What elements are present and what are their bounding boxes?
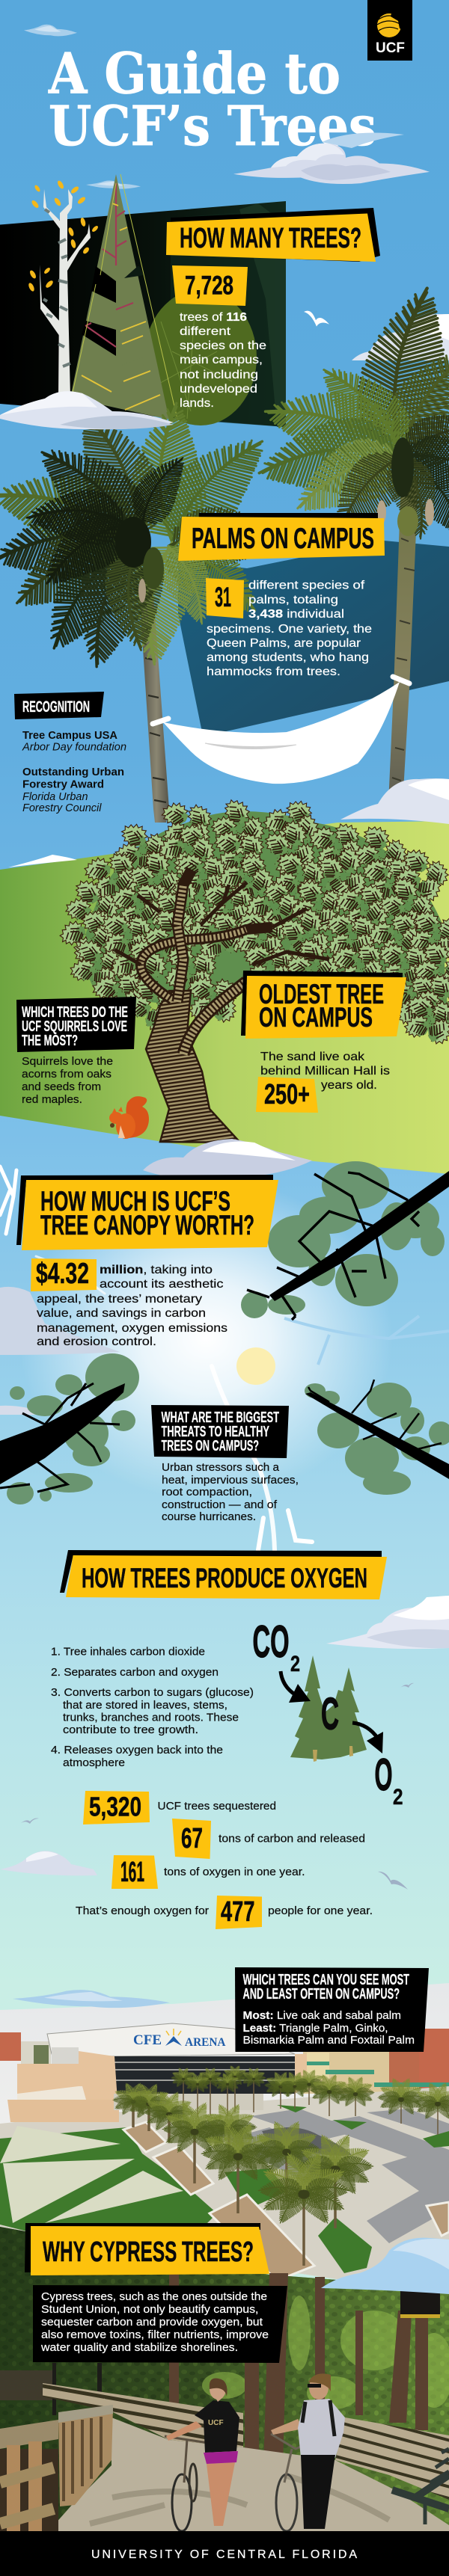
text: recognition list: Forestry Award (22, 779, 104, 791)
cloud: left behind text (0, 1287, 120, 1415)
text: canopy worth: million , taking into (100, 1264, 213, 1276)
text: oldest tree: The sand live oak (260, 1051, 365, 1063)
heading: canopy worth (16, 1175, 278, 1250)
hillside (0, 821, 449, 1174)
near railing (0, 2420, 58, 2531)
text: canopy worth: appeal, the trees’ monetary (37, 1293, 202, 1306)
box: squirrels question (16, 997, 136, 1052)
text: trees count: not including (180, 369, 258, 381)
text: recognition list (22, 730, 126, 814)
footer (0, 2531, 449, 2576)
icon: bird (304, 311, 329, 327)
box: most and least trees (235, 1967, 429, 2052)
box: cypress text (33, 2285, 287, 2363)
stat: 161: 161 (120, 1857, 144, 1888)
text: trees count: different (180, 325, 231, 338)
trunks (52, 2273, 428, 2468)
text: palm species: 3,438 individual (248, 608, 344, 621)
photo: students on boardwalk (0, 2227, 449, 2531)
text: oxygen steps: 1. Tree inhales carbon dioxide (51, 1645, 205, 1659)
footer: UNIVERSITY OF CENTRAL FLORIDA (91, 2548, 357, 2561)
illustration: branch bottom left (0, 1353, 139, 1504)
stat: 477: people for one year. (268, 1905, 373, 1917)
logo: CFE Arena (133, 2029, 226, 2049)
icon: squirrel (109, 1096, 149, 1139)
text: threats answer: heat, impervious surfaces, (162, 1474, 299, 1487)
illustration: left palm (0, 399, 287, 823)
building: dorms right (303, 2029, 449, 2094)
stat: 67 (172, 1819, 365, 1859)
text: squirrels answer: Squirrels love the (22, 1055, 113, 1068)
illustration: branch bottom right (305, 1380, 449, 1495)
text: threats answer: root compaction, (162, 1486, 252, 1498)
stat: 31 (206, 578, 244, 618)
text: oldest tree: behind Millican Hall is (260, 1065, 390, 1078)
text: palm species: specimens. One variety, the (207, 623, 372, 636)
illustration: right palm (257, 286, 449, 804)
text: trees count (180, 311, 266, 410)
cloud: bottom right (321, 2238, 449, 2294)
heading: canopy worth: HOW MUCH IS UCF’S (40, 1186, 230, 1217)
text: oxygen steps: atmosphere (63, 1756, 125, 1769)
cloud: large under title (233, 133, 430, 184)
cloud: behind cone (86, 181, 141, 189)
text: threats answer (162, 1461, 299, 1523)
diagram: carbon cycle: 2 (290, 1652, 300, 1676)
logo: CFE Arena: CFE (133, 2032, 162, 2048)
right railing (335, 2417, 449, 2500)
text: trees count: trees of 116 (180, 311, 247, 324)
text: canopy worth (37, 1264, 227, 1348)
text: canopy worth: value, and savings in carbon (37, 1307, 206, 1320)
box: threats question: THREATS TO HEALTHY (162, 1423, 269, 1440)
text: palm species: palms, totaling (248, 594, 338, 606)
heading: how trees produce oxygen (60, 1550, 387, 1599)
cloud: top small (24, 25, 77, 36)
panel: palms background (178, 541, 449, 732)
stat: 5,320: UCF trees sequestered (157, 1800, 276, 1813)
arena roof (47, 2023, 295, 2056)
text: squirrels answer: red maples. (22, 1093, 82, 1106)
stat: 250+: 250+ (264, 1079, 310, 1110)
left railing (58, 2405, 113, 2506)
text: squirrels answer (22, 1055, 113, 1106)
text: canopy worth: and erosion control. (37, 1335, 156, 1348)
text: palm species: Queen Palms, are popular (207, 637, 361, 650)
diagram: carbon cycle: 2 (393, 1785, 403, 1810)
sun glow (19, 1178, 393, 1499)
background foliage (202, 2296, 449, 2409)
cloud: right behind palm (352, 314, 449, 360)
text: trees count: main campus, (180, 354, 263, 366)
heading: why cypress trees: WHY CYPRESS TREES? (43, 2237, 254, 2268)
stat: 477: 477 (221, 1896, 254, 1928)
text: oxygen steps: 2. Separates carbon and oxygen (51, 1666, 219, 1679)
box: most and least trees: Most: Live oak and sabal palm (242, 2009, 401, 2022)
stat: 477: That’s enough oxygen for (76, 1905, 209, 1917)
text: recognition list: Outstanding Urban (22, 766, 124, 778)
text: oxygen steps: 4. Releases oxygen back into the (51, 1744, 223, 1756)
arena facade (79, 2051, 119, 2122)
text: trees count: species on the (180, 339, 266, 352)
arrow: in (281, 1671, 311, 1703)
boardwalk deck (49, 2417, 449, 2531)
box: cypress text: water quality and stabilize shorelines. (40, 2341, 238, 2354)
text: palm species (207, 579, 372, 678)
illustration: cone tree (70, 174, 179, 425)
logo: UCF: UCF (376, 40, 405, 56)
student: man (271, 2373, 345, 2531)
cloud: right of diagram (326, 1596, 449, 1649)
box: threats question (151, 1405, 289, 1458)
box: most and least trees: Bismarkia Palm and Foxtail Palm (242, 2034, 415, 2047)
label: recognition: RECOGNITION (22, 698, 90, 716)
logo: CFE Arena: ARENA (185, 2036, 226, 2049)
text: oxygen steps: trunks, branches and roots. These (63, 1711, 239, 1724)
box: cypress text: Student Union, not only beautify campus, (41, 2303, 259, 2316)
stat: 477 (76, 1896, 373, 1929)
cloud: island bottom-left of panel (0, 391, 174, 429)
box: most and least trees: Least: Triangle Palm, Ginko, (242, 2022, 388, 2035)
planters (123, 2122, 449, 2281)
text: threats answer: construction — and of (162, 1498, 278, 1511)
text: palm species: different species of (248, 579, 365, 592)
text: palm species: among students, who hang (207, 651, 369, 664)
photo: CFE Arena plaza (0, 1983, 449, 2288)
diagram: carbon cycle: C (321, 1688, 339, 1739)
stat: 250+ (256, 1077, 318, 1113)
arena wall (52, 2047, 79, 2071)
text: palm species: hammocks from trees. (207, 665, 340, 678)
stat: 67: 67 (181, 1823, 203, 1854)
text: oxygen steps: 3. Converts carbon to sugars (glucose) (51, 1686, 254, 1699)
stat: 31: 31 (215, 582, 231, 612)
title: A Guide to (48, 40, 340, 106)
stat: 7,728: 7,728 (185, 271, 233, 301)
heading: why cypress trees (25, 2223, 269, 2275)
box: cypress text: also remove toxins, filter nutrients, improve (41, 2328, 269, 2341)
arrow: out (352, 1723, 383, 1753)
sign (400, 2288, 440, 2318)
ground: paving stripes (224, 2109, 449, 2243)
heading: canopy worth: TREE CANOPY WORTH? (40, 1210, 254, 1241)
stat: 7,728 (172, 265, 248, 306)
title: UCF’s Trees (49, 94, 376, 159)
diagram: carbon cycle (253, 1617, 403, 1810)
cloud: under trunk (143, 1139, 312, 1182)
illustration: hammock (153, 677, 409, 784)
text: squirrels answer: and seeds from (22, 1080, 101, 1093)
artwork: pegasus paving (262, 2127, 352, 2156)
illustration: oak tree (52, 789, 449, 1143)
text: oxygen steps: contribute to tree growth. (63, 1724, 198, 1736)
ground: lawn (0, 2105, 449, 2273)
text: trees count: lands. (180, 397, 214, 410)
stat: 5,320: 5,320 (89, 1792, 141, 1822)
palm trees (112, 2065, 449, 2266)
pale branches (0, 1166, 312, 1550)
ground: plaza (0, 2086, 449, 2288)
illustration: branch top right (241, 1161, 449, 1320)
bench (392, 2449, 449, 2524)
text: trees count: undeveloped (180, 383, 257, 396)
title (48, 40, 376, 159)
text: oxygen steps: that are stored in leaves, stems, (63, 1699, 227, 1712)
stat: 161: tons of oxygen in one year. (164, 1866, 305, 1878)
stat: 161 (112, 1855, 305, 1889)
icons: birds (21, 1683, 414, 1890)
student: woman: UCF (208, 2419, 224, 2427)
box: threats question: WHAT ARE THE BIGGEST (162, 1409, 279, 1426)
panel: how many trees (0, 201, 286, 427)
icon: sun (236, 1347, 275, 1385)
student: woman (165, 2379, 239, 2531)
stat: $4.32: $4.32 (36, 1258, 89, 1290)
heading: palms on campus (178, 513, 385, 561)
illustration: birch tree (28, 179, 99, 396)
text: canopy worth: management, oxygen emissions (37, 1322, 227, 1335)
diagram: carbon cycle: CO (253, 1617, 289, 1667)
text: recognition list: Florida Urban (22, 791, 88, 803)
cloud: left of stats (0, 1851, 97, 1875)
box: cypress text: Cypress trees, such as the ones outside the (41, 2290, 267, 2303)
logo: UCF (367, 0, 412, 61)
building: dorms left (0, 2032, 51, 2068)
text: recognition list: Tree Campus USA (22, 730, 118, 742)
text: threats answer: Urban stressors such a (162, 1461, 280, 1474)
box: squirrels question: THE MOST? (22, 1032, 78, 1049)
stat: 67: tons of carbon and released (219, 1833, 365, 1845)
shade sails (0, 2126, 183, 2223)
text: oldest tree: years old. (321, 1079, 377, 1092)
text: recognition list: Forestry Council (22, 802, 102, 814)
box: squirrels question: WHICH TREES DO THE (22, 1003, 128, 1021)
heading: oldest tree: ON CAMPUS (259, 1002, 373, 1033)
stat: 5,320 (83, 1791, 276, 1825)
icon: trees (290, 1656, 367, 1762)
box: cypress text: sequester carbon and provide oxygen, but (41, 2316, 263, 2328)
cloud: hillside (8, 778, 449, 867)
text: threats answer: course hurricanes. (162, 1510, 256, 1523)
text: canopy worth: account its aesthetic (100, 1278, 223, 1291)
label: recognition (14, 692, 104, 719)
text: squirrels answer: acorns from oaks (22, 1068, 112, 1080)
heading: how many trees (166, 208, 380, 262)
heading: oldest tree: OLDEST TREE (259, 979, 384, 1009)
back railing (43, 2383, 243, 2447)
cloud: over photo (13, 1990, 170, 2008)
arena windows (114, 2056, 295, 2094)
box: threats question: TREES ON CAMPUS? (162, 1437, 259, 1454)
heading: oldest tree (241, 971, 406, 1039)
text: oxygen steps (51, 1645, 254, 1769)
diagram: carbon cycle: O (374, 1750, 392, 1800)
box: squirrels question: UCF SQUIRRELS LOVE (22, 1018, 127, 1035)
text: recognition list: Arbor Day foundation (22, 742, 126, 754)
text: oldest tree (260, 1051, 390, 1092)
